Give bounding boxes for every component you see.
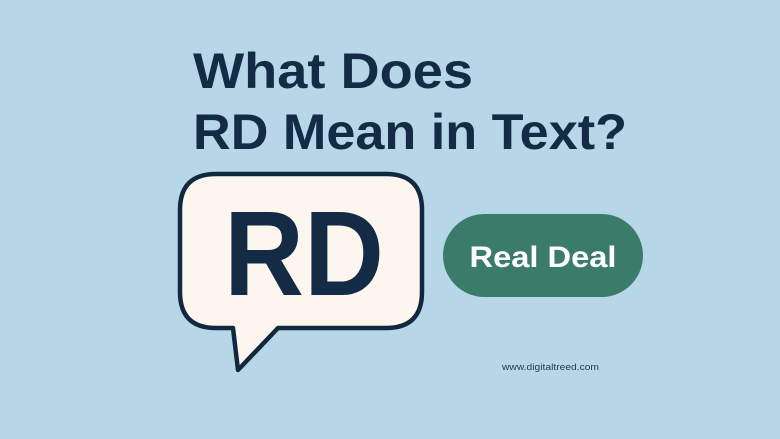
- pill: Real Deal: [443, 214, 643, 297]
- title: RD Mean in Text?: [193, 104, 627, 160]
- title: What Does: [193, 43, 473, 99]
- title: [193, 43, 627, 160]
- speech bubble: [180, 174, 422, 370]
- pill: Real Deal: Real Deal: [470, 241, 616, 274]
- website credit: www.digitaltreed.com: [501, 362, 599, 372]
- bubble text: RD: RD: [224, 185, 384, 321]
